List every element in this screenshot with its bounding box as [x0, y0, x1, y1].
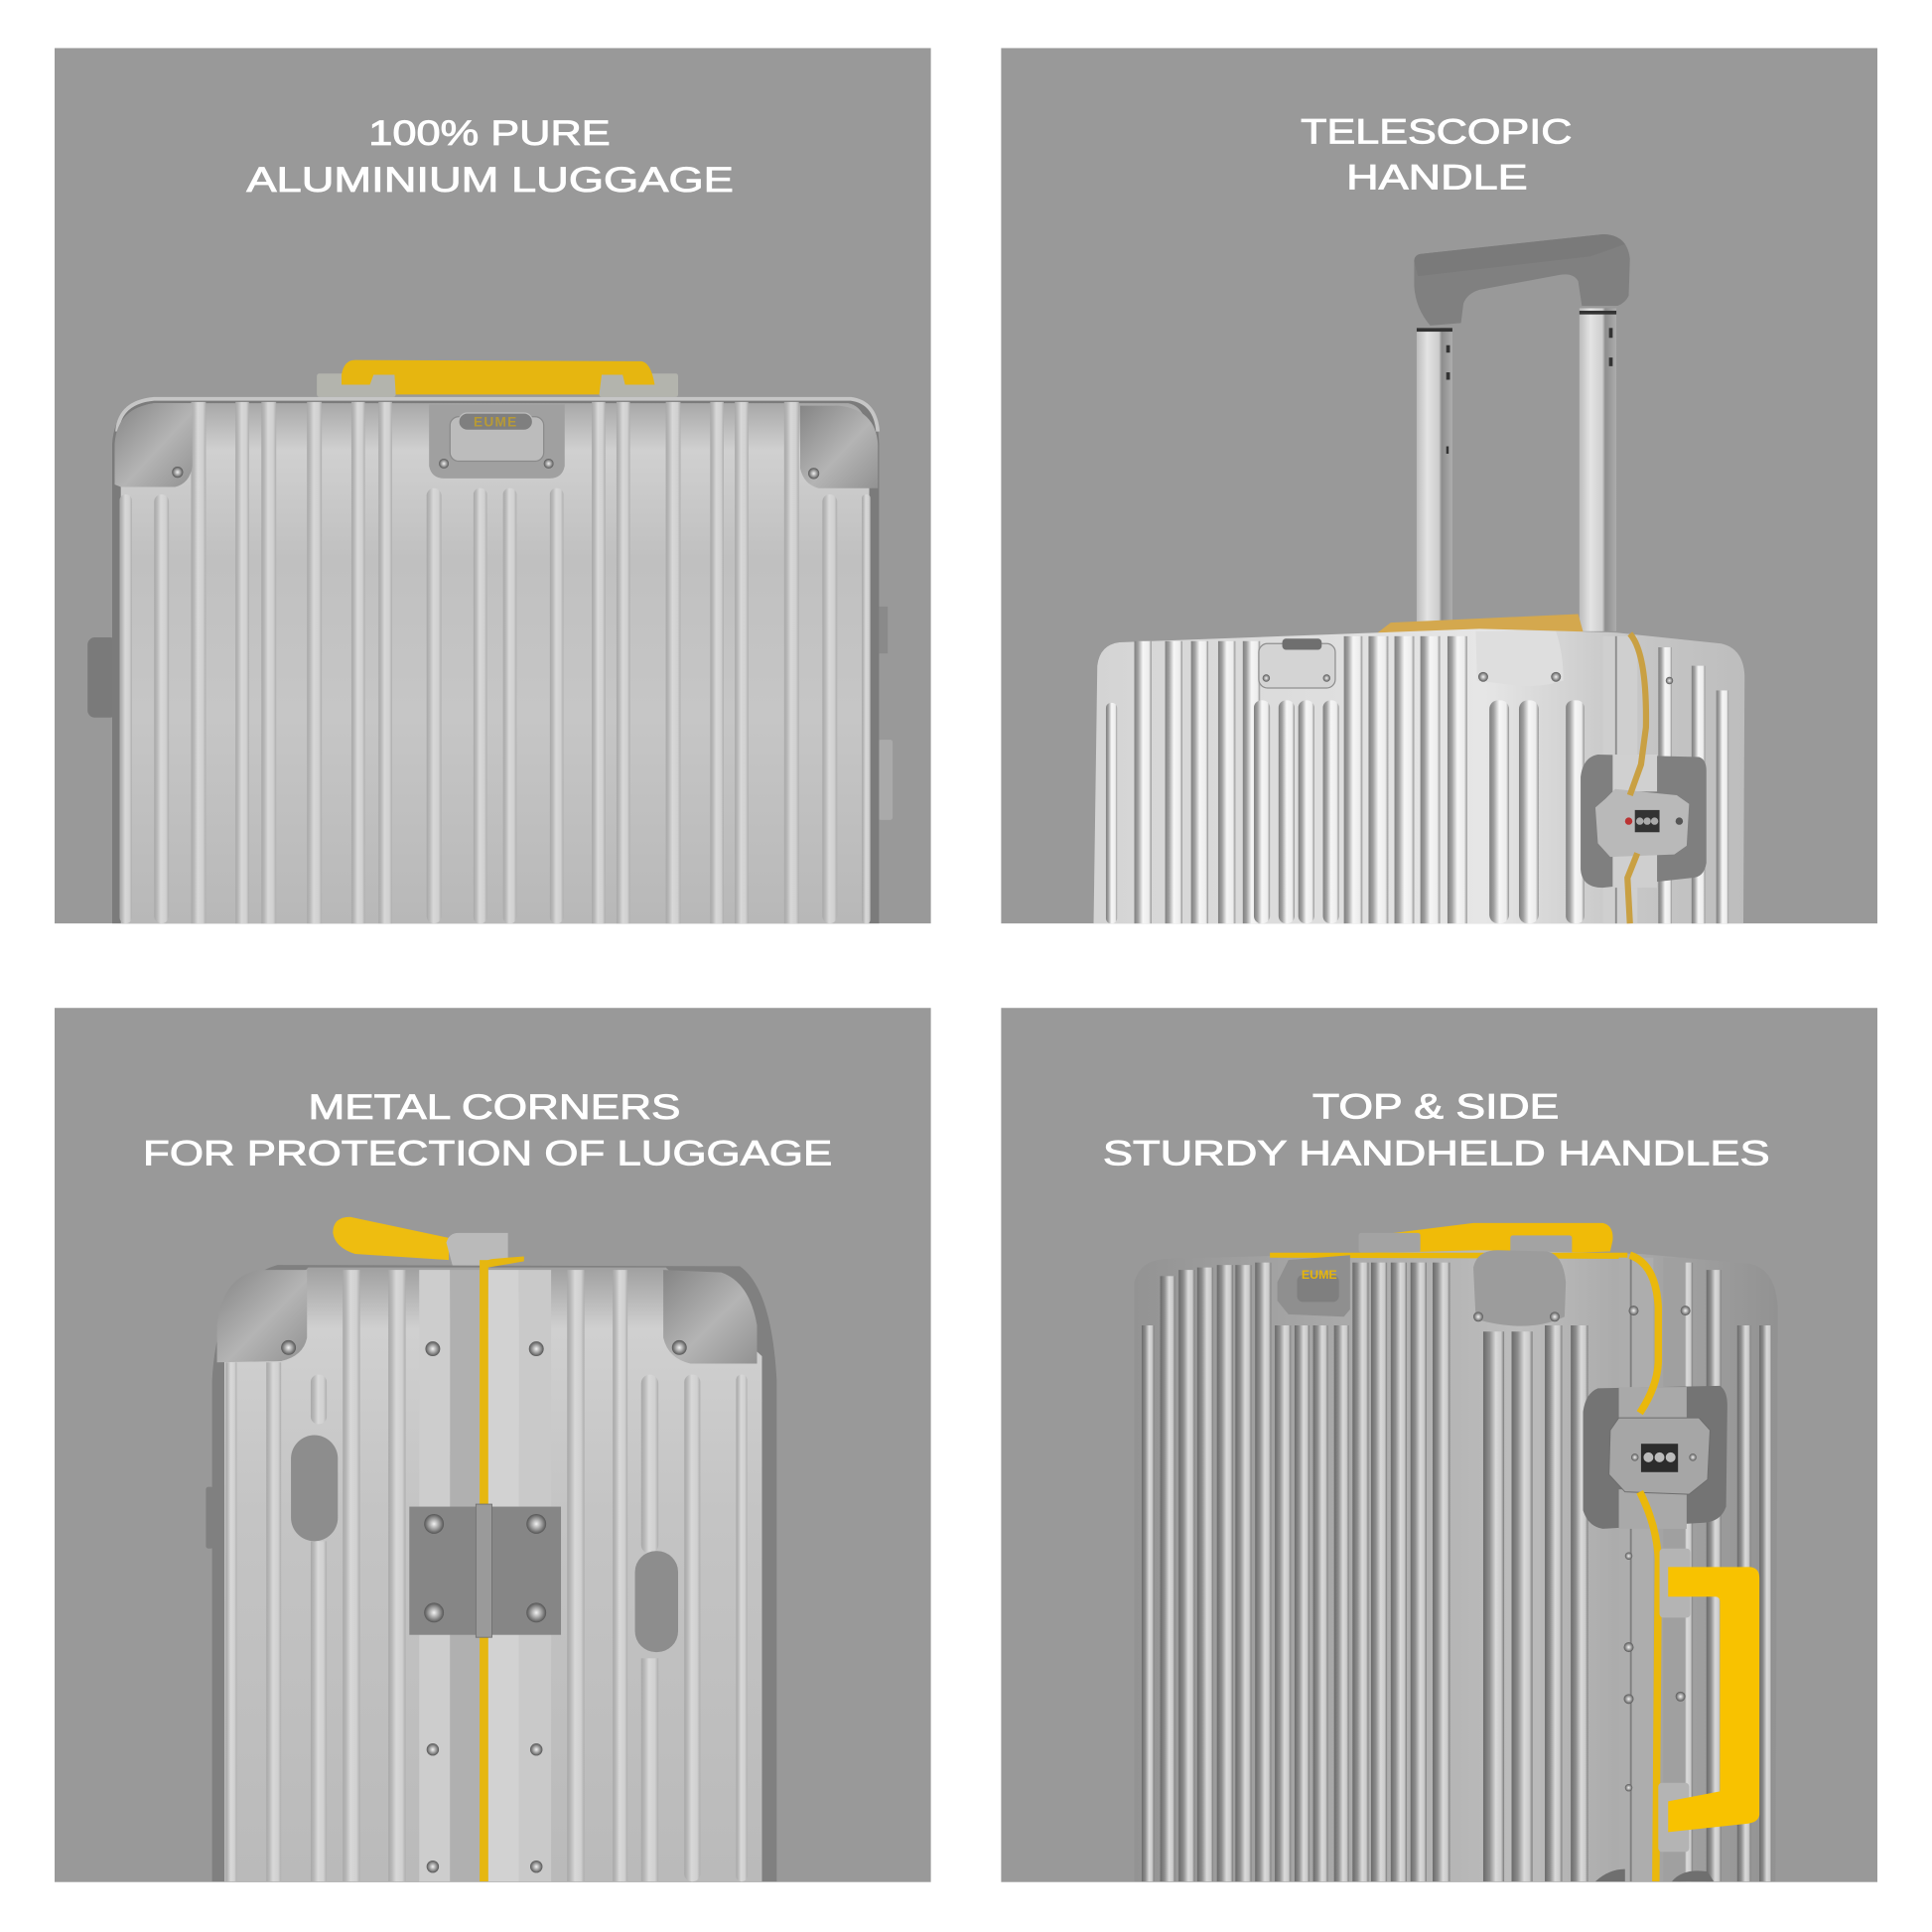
- hinge plate: [409, 1504, 561, 1637]
- side handle brackets: [1660, 1549, 1691, 1617]
- yellow strap: [1627, 633, 1646, 923]
- rivets: [281, 1340, 687, 1872]
- yellow strap: [480, 1260, 488, 1881]
- yellow top handle: [342, 360, 654, 394]
- metal corner right: [663, 1270, 758, 1364]
- recessed grip left: [291, 1436, 338, 1541]
- ribs: [1142, 1263, 1772, 1881]
- yellow top handle: [1375, 1223, 1612, 1254]
- heading: telescopic handle: HANDLE: [1346, 159, 1528, 198]
- heading: top and side sturdy handheld handles: TOP & SIDE: [1312, 1087, 1559, 1126]
- combination lock: [1584, 1386, 1727, 1529]
- suitcase: side view: [206, 1217, 776, 1881]
- suitcase: three-quarter view: [1094, 614, 1744, 923]
- heading: telescopic handle: [1301, 113, 1572, 198]
- combination lock: [1581, 755, 1707, 888]
- central latch and logo: [429, 404, 565, 479]
- panel: telescopic handle: [1001, 48, 1877, 923]
- heading: top and side sturdy handheld handles: STURDY HANDHELD HANDLES: [1103, 1135, 1770, 1173]
- central frame: [419, 1270, 450, 1881]
- metal corner cap: [1473, 1250, 1566, 1326]
- recessed grip right: [635, 1551, 678, 1652]
- metal corner left: [114, 403, 193, 487]
- frame: [1619, 1258, 1653, 1881]
- yellow side handle: [1668, 1567, 1759, 1832]
- bottom wheel recesses: [1595, 1869, 1714, 1881]
- heading: 100% pure aluminium luggage: ALUMINIUM LUGGAGE: [246, 161, 734, 200]
- heading: metal corners for protection of luggage: METAL CORNERS: [308, 1088, 681, 1127]
- heading: telescopic handle: TELESCOPIC: [1301, 113, 1572, 152]
- heading: 100% pure aluminium luggage: 100% PURE: [368, 114, 611, 153]
- ribs: [225, 1270, 748, 1881]
- rivets: [1473, 1306, 1691, 1791]
- metal corner: [1476, 631, 1564, 686]
- ribs: [1106, 636, 1728, 923]
- central latch and logo: EUME: [474, 415, 517, 430]
- telescopic handle: [1414, 234, 1630, 631]
- latch: [1259, 643, 1335, 688]
- metal corner left: [217, 1270, 307, 1362]
- vertical ribs: [119, 402, 871, 923]
- metal corner right: [800, 406, 878, 488]
- heading: top and side sturdy handheld handles: [1103, 1087, 1770, 1173]
- heading: 100% pure aluminium luggage: [246, 114, 734, 200]
- heading: metal corners for protection of luggage: FOR PROTECTION OF LUGGAGE: [143, 1135, 832, 1173]
- latch and logo: EUME: [1302, 1268, 1337, 1282]
- yellow strap: [1630, 1255, 1658, 1881]
- panel: 100% pure aluminium luggage: [55, 48, 931, 923]
- panel: metal corners: [55, 1008, 931, 1882]
- panel: top and side handles: [1001, 1008, 1877, 1882]
- suitcase: three-quarter view, darker: [1135, 1223, 1778, 1881]
- frame and strap: [1602, 636, 1637, 923]
- suitcase: front view: [87, 360, 893, 923]
- heading: metal corners for protection of luggage: [143, 1088, 832, 1173]
- yellow handle, side on: [333, 1217, 449, 1260]
- latch and logo: [1278, 1255, 1350, 1316]
